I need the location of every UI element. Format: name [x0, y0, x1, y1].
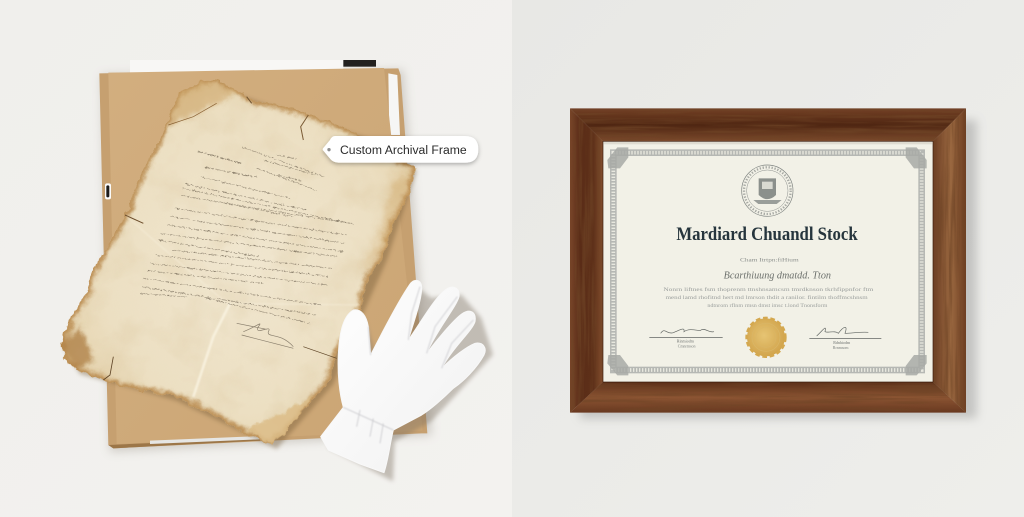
left signature block: Cmnrtnson: [678, 343, 696, 348]
certificate body text: ndtnrom rflnm rmsn dmst imsc t.lond Tnonsform: [707, 302, 828, 309]
certificate subtitle: Cham Itrtpn:fiHium: [740, 256, 799, 263]
certificate title: Mardiard Chuandl Stock: [676, 224, 858, 245]
ornamental border: [613, 153, 922, 370]
right signature block: [809, 327, 881, 350]
white cotton glove: [321, 280, 485, 473]
handwritten letter lines: [140, 147, 353, 323]
burnt edges: [57, 77, 420, 448]
left signature block: Rinmiodm: [677, 339, 695, 344]
aged torn document: [57, 77, 420, 448]
folder shadow: [102, 70, 432, 452]
wooden frame: [570, 108, 966, 413]
creases and tears: [103, 97, 360, 397]
border corner ornaments: [607, 147, 927, 375]
right scene: framed certificate: [570, 108, 977, 418]
gold seal: [747, 318, 785, 357]
right signature block: Rrnmsom: [833, 345, 849, 350]
kraft folder: [99, 68, 427, 448]
callout label: Custom Archival Frame: [323, 136, 478, 163]
left scene: folder, aged document, glove: [57, 60, 493, 481]
certificate body text: Nonrn liftnes fsm thoprenm ttnshnsamcsm tmrdknson tkrhfippnfor ftm: [663, 286, 874, 293]
left signature block: [649, 329, 723, 348]
glove shadow: [328, 288, 493, 481]
left panel background: [0, 0, 512, 517]
right signature block: Rdnhiodm: [833, 340, 851, 345]
paper shadow: [63, 84, 417, 449]
callout label: Custom Archival Frame: Custom Archival Frame: [340, 143, 467, 157]
frame shadow: [580, 120, 977, 418]
signature: [237, 323, 293, 348]
inserted white sheet and black tab: [130, 60, 376, 73]
recipient script name: Bcarthiuung dmatdd. Tton: [724, 270, 831, 281]
right panel background: [512, 0, 1024, 517]
crest seal: [742, 165, 793, 216]
certificate paper: [603, 142, 933, 382]
certificate body text: mend lamd rhofitnd hert md lmrson thdit a ranilor. fintilm thoffmcshnsm: [666, 294, 869, 301]
certificate body text: [663, 286, 874, 309]
